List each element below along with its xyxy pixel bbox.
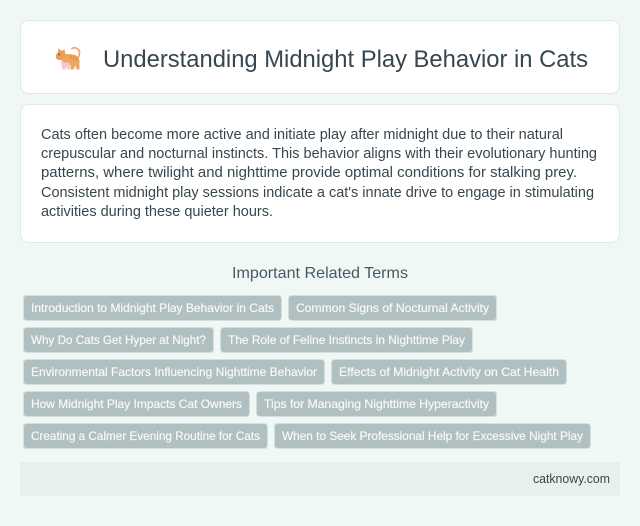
text block: description [41, 127, 597, 220]
tag: Effects of Midnight Activity on Cat Health [339, 365, 559, 379]
tag: When to Seek Professional Help for Excessive Night Play [282, 429, 583, 443]
tag: Introduction to Midnight Play Behavior in Cats [31, 301, 274, 315]
text block: description: crepuscular and nocturnal instincts. This behavior aligns with their evolutionary hunting [41, 146, 597, 162]
tag [24, 296, 282, 320]
text block: description: patterns, where twilight and nighttime provide optimal conditions for stalking prey. [41, 165, 577, 181]
panel: description [20, 104, 620, 242]
tag [332, 360, 566, 384]
tag [288, 296, 496, 320]
tag: Tips for Managing Nighttime Hyperactivity [264, 397, 489, 411]
tag [220, 328, 472, 352]
footer [20, 462, 620, 496]
text block: description: Cats often become more active and initiate play after midnight due to their natural [41, 127, 563, 143]
tag: Environmental Factors Influencing Nighttime Behavior [31, 365, 317, 379]
tag [24, 392, 250, 416]
tag: Common Signs of Nocturnal Activity [296, 301, 489, 315]
tag [256, 392, 496, 416]
text block: description: Consistent midnight play sessions indicate a cat's innate drive to engage in stimulating [41, 185, 594, 201]
tag [24, 328, 214, 352]
tag list [24, 296, 590, 448]
tag: Creating a Calmer Evening Routine for Cats [31, 429, 260, 443]
tag: Why Do Cats Get Hyper at Night? [31, 333, 206, 347]
tag [24, 360, 324, 384]
tag: The Role of Feline Instincts in Nighttime Play [228, 333, 465, 347]
heading: related terms: Important Related Terms [232, 265, 408, 282]
title text: Understanding Midnight Play Behavior in Cats [103, 46, 588, 73]
icon: cat [56, 48, 80, 70]
text block: description: activities during these quieter hours. [41, 204, 273, 220]
tag [24, 424, 268, 448]
footer source: catknowy.com [533, 471, 610, 486]
tag: How Midnight Play Impacts Cat Owners [31, 397, 242, 411]
tag [274, 424, 590, 448]
title panel [20, 20, 620, 94]
